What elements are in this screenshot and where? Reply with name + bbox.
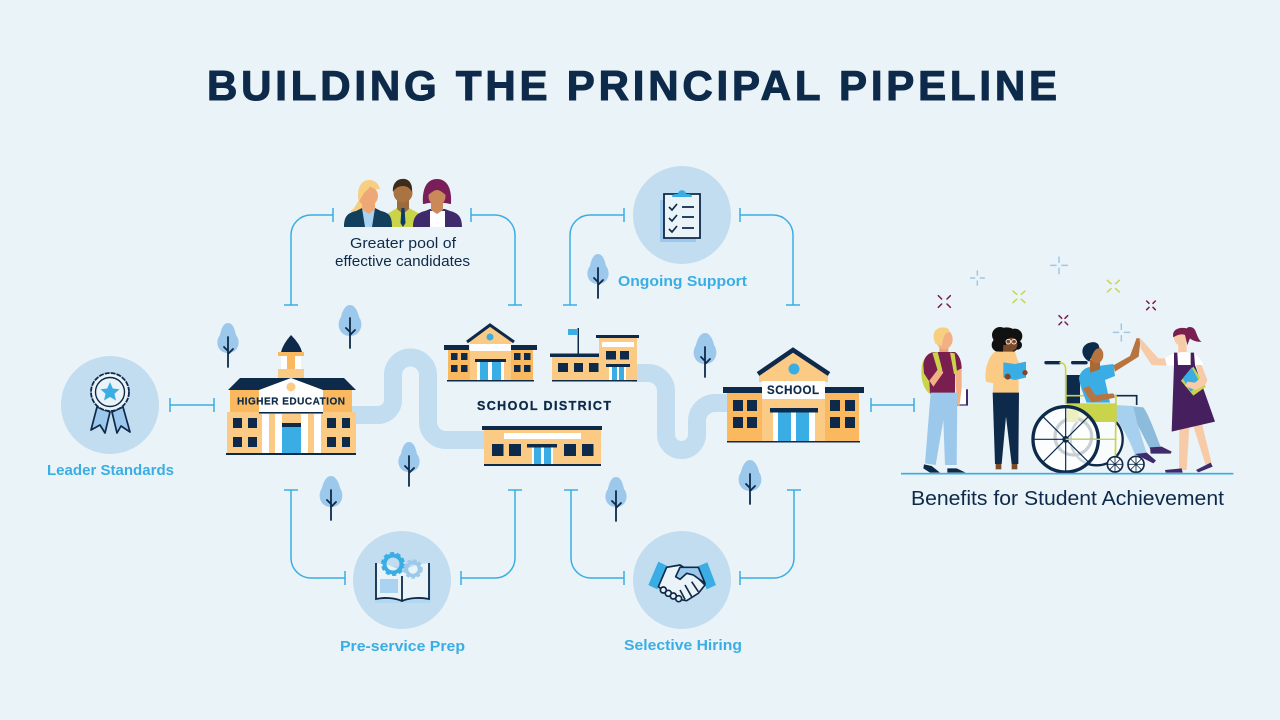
- tree 7: [605, 477, 627, 521]
- student high-fiving: [1139, 327, 1215, 473]
- icon: award ribbon: [61, 356, 159, 454]
- tree 3: [398, 442, 420, 486]
- bracket: pre-service right: [461, 490, 522, 585]
- tree 8: [739, 460, 761, 504]
- building: school district top right: [550, 328, 639, 382]
- bracket: candidates left: [284, 208, 333, 305]
- text: greater pool of effective candidates: Greater pool of: [350, 235, 457, 252]
- connector: school to student benefits: [871, 398, 914, 412]
- label: benefits for student achievement: Benefits for Student Achievement: [911, 487, 1224, 510]
- road: higher education to school district: [350, 358, 490, 440]
- bracket: selective hiring right: [740, 490, 801, 585]
- icon: open book with gears: [353, 531, 451, 629]
- label: school district: SCHOOL DISTRICT: [477, 399, 611, 413]
- panel: leader standards: [47, 356, 174, 479]
- label: ongoing support: Ongoing Support: [618, 273, 747, 290]
- building: higher education: HIGHER EDUCATION: [237, 396, 345, 408]
- tree 1: [217, 323, 239, 367]
- building: school district top left: [444, 325, 537, 382]
- bracket: selective hiring left: [564, 490, 624, 585]
- tree 2: [339, 305, 361, 348]
- bracket: ongoing support left: [563, 208, 624, 305]
- panel: pre-service prep: [340, 531, 465, 655]
- illustration: students celebrating: [901, 257, 1233, 474]
- icon: three candidates: [344, 179, 462, 227]
- panel: candidates: [335, 179, 470, 270]
- sparkles: [938, 257, 1155, 341]
- building: school: SCHOOL: [767, 385, 819, 397]
- panel: selective hiring: [624, 531, 742, 654]
- bracket: candidates right: [471, 208, 522, 305]
- icon: clipboard checklist: [633, 166, 731, 264]
- building: school district bottom: [482, 426, 602, 466]
- connector: leader standards to higher education: [170, 398, 214, 412]
- student with book: [986, 327, 1028, 469]
- text: greater pool of effective candidates: effective candidates: [335, 253, 470, 270]
- label: selective hiring: Selective Hiring: [624, 637, 742, 654]
- tree 4: [320, 476, 342, 520]
- text: greater pool of effective candidates: [335, 235, 470, 270]
- title: BUILDING THE PRINCIPAL PIPELINE: [207, 62, 1057, 109]
- building: school: [723, 350, 864, 442]
- bracket: pre-service left: [284, 490, 345, 585]
- label: pre-service prep: Pre-service Prep: [340, 638, 465, 655]
- student with backpack: [921, 327, 968, 473]
- tree 6: [694, 333, 716, 377]
- tree 5: [587, 254, 609, 298]
- icon: handshake: [633, 531, 731, 629]
- road: school district to school: [632, 373, 730, 450]
- student in wheelchair: [1033, 338, 1172, 472]
- ground line: [901, 473, 1233, 474]
- bracket: ongoing support right: [740, 208, 800, 305]
- panel: ongoing support: [618, 166, 747, 290]
- label: leader standards: Leader Standards: [47, 462, 174, 479]
- building: higher education: [226, 335, 356, 455]
